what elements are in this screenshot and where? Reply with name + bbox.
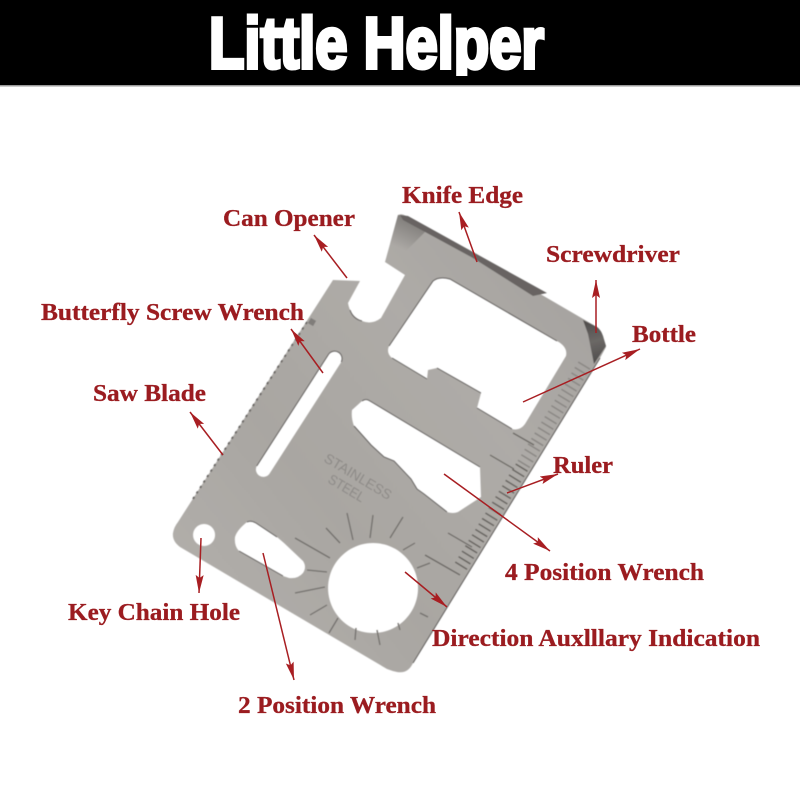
label: 2 position wrench: 2 Position Wrench bbox=[238, 693, 436, 719]
stainless steel stamp: STAINLESS bbox=[321, 450, 395, 503]
arrow: ruler bbox=[507, 474, 558, 493]
label: butterfly screw wrench: Butterfly Screw Wrench bbox=[41, 300, 304, 326]
stainless steel stamp: STEEL bbox=[325, 471, 368, 505]
card body bbox=[173, 214, 606, 672]
arrow: key chain hole bbox=[199, 538, 201, 593]
arrow: screwdriver bbox=[595, 280, 597, 333]
screwdriver bevel bbox=[583, 320, 606, 364]
blade bevel bbox=[385, 215, 425, 262]
arrow: bottle bbox=[523, 349, 640, 402]
label: key chain hole: Key Chain Hole bbox=[68, 600, 240, 626]
label: knife edge: Knife Edge bbox=[402, 183, 523, 209]
arrow: can opener bbox=[314, 235, 347, 278]
arrow: 2 position wrench bbox=[263, 553, 294, 680]
label: screwdriver: Screwdriver bbox=[546, 242, 680, 268]
label: 4 position wrench: 4 Position Wrench bbox=[505, 560, 704, 586]
arrow: knife edge bbox=[459, 212, 477, 262]
label: can opener: Can Opener bbox=[223, 206, 355, 232]
arrow: 4 position wrench bbox=[444, 474, 550, 551]
title banner bbox=[0, 0, 800, 86]
saw blade teeth bbox=[189, 318, 316, 502]
label: direction auxiliary indication: Direction Auxlllary Indication bbox=[432, 626, 760, 652]
ruler ticks bbox=[425, 365, 584, 575]
hole rims bbox=[239, 278, 557, 576]
right card edge bbox=[413, 358, 600, 663]
label: ruler: Ruler bbox=[553, 453, 613, 479]
multi-tool card bbox=[173, 214, 606, 672]
knife edge bevel bbox=[400, 215, 547, 296]
label: bottle: Bottle bbox=[632, 322, 696, 348]
arrow: butterfly screw wrench bbox=[291, 329, 323, 373]
title: Little Helper bbox=[209, 4, 544, 84]
label: saw blade: Saw Blade bbox=[93, 381, 206, 407]
direction ticks bbox=[295, 513, 430, 645]
arrow: direction indication bbox=[405, 572, 447, 607]
arrow: saw blade bbox=[190, 412, 223, 455]
